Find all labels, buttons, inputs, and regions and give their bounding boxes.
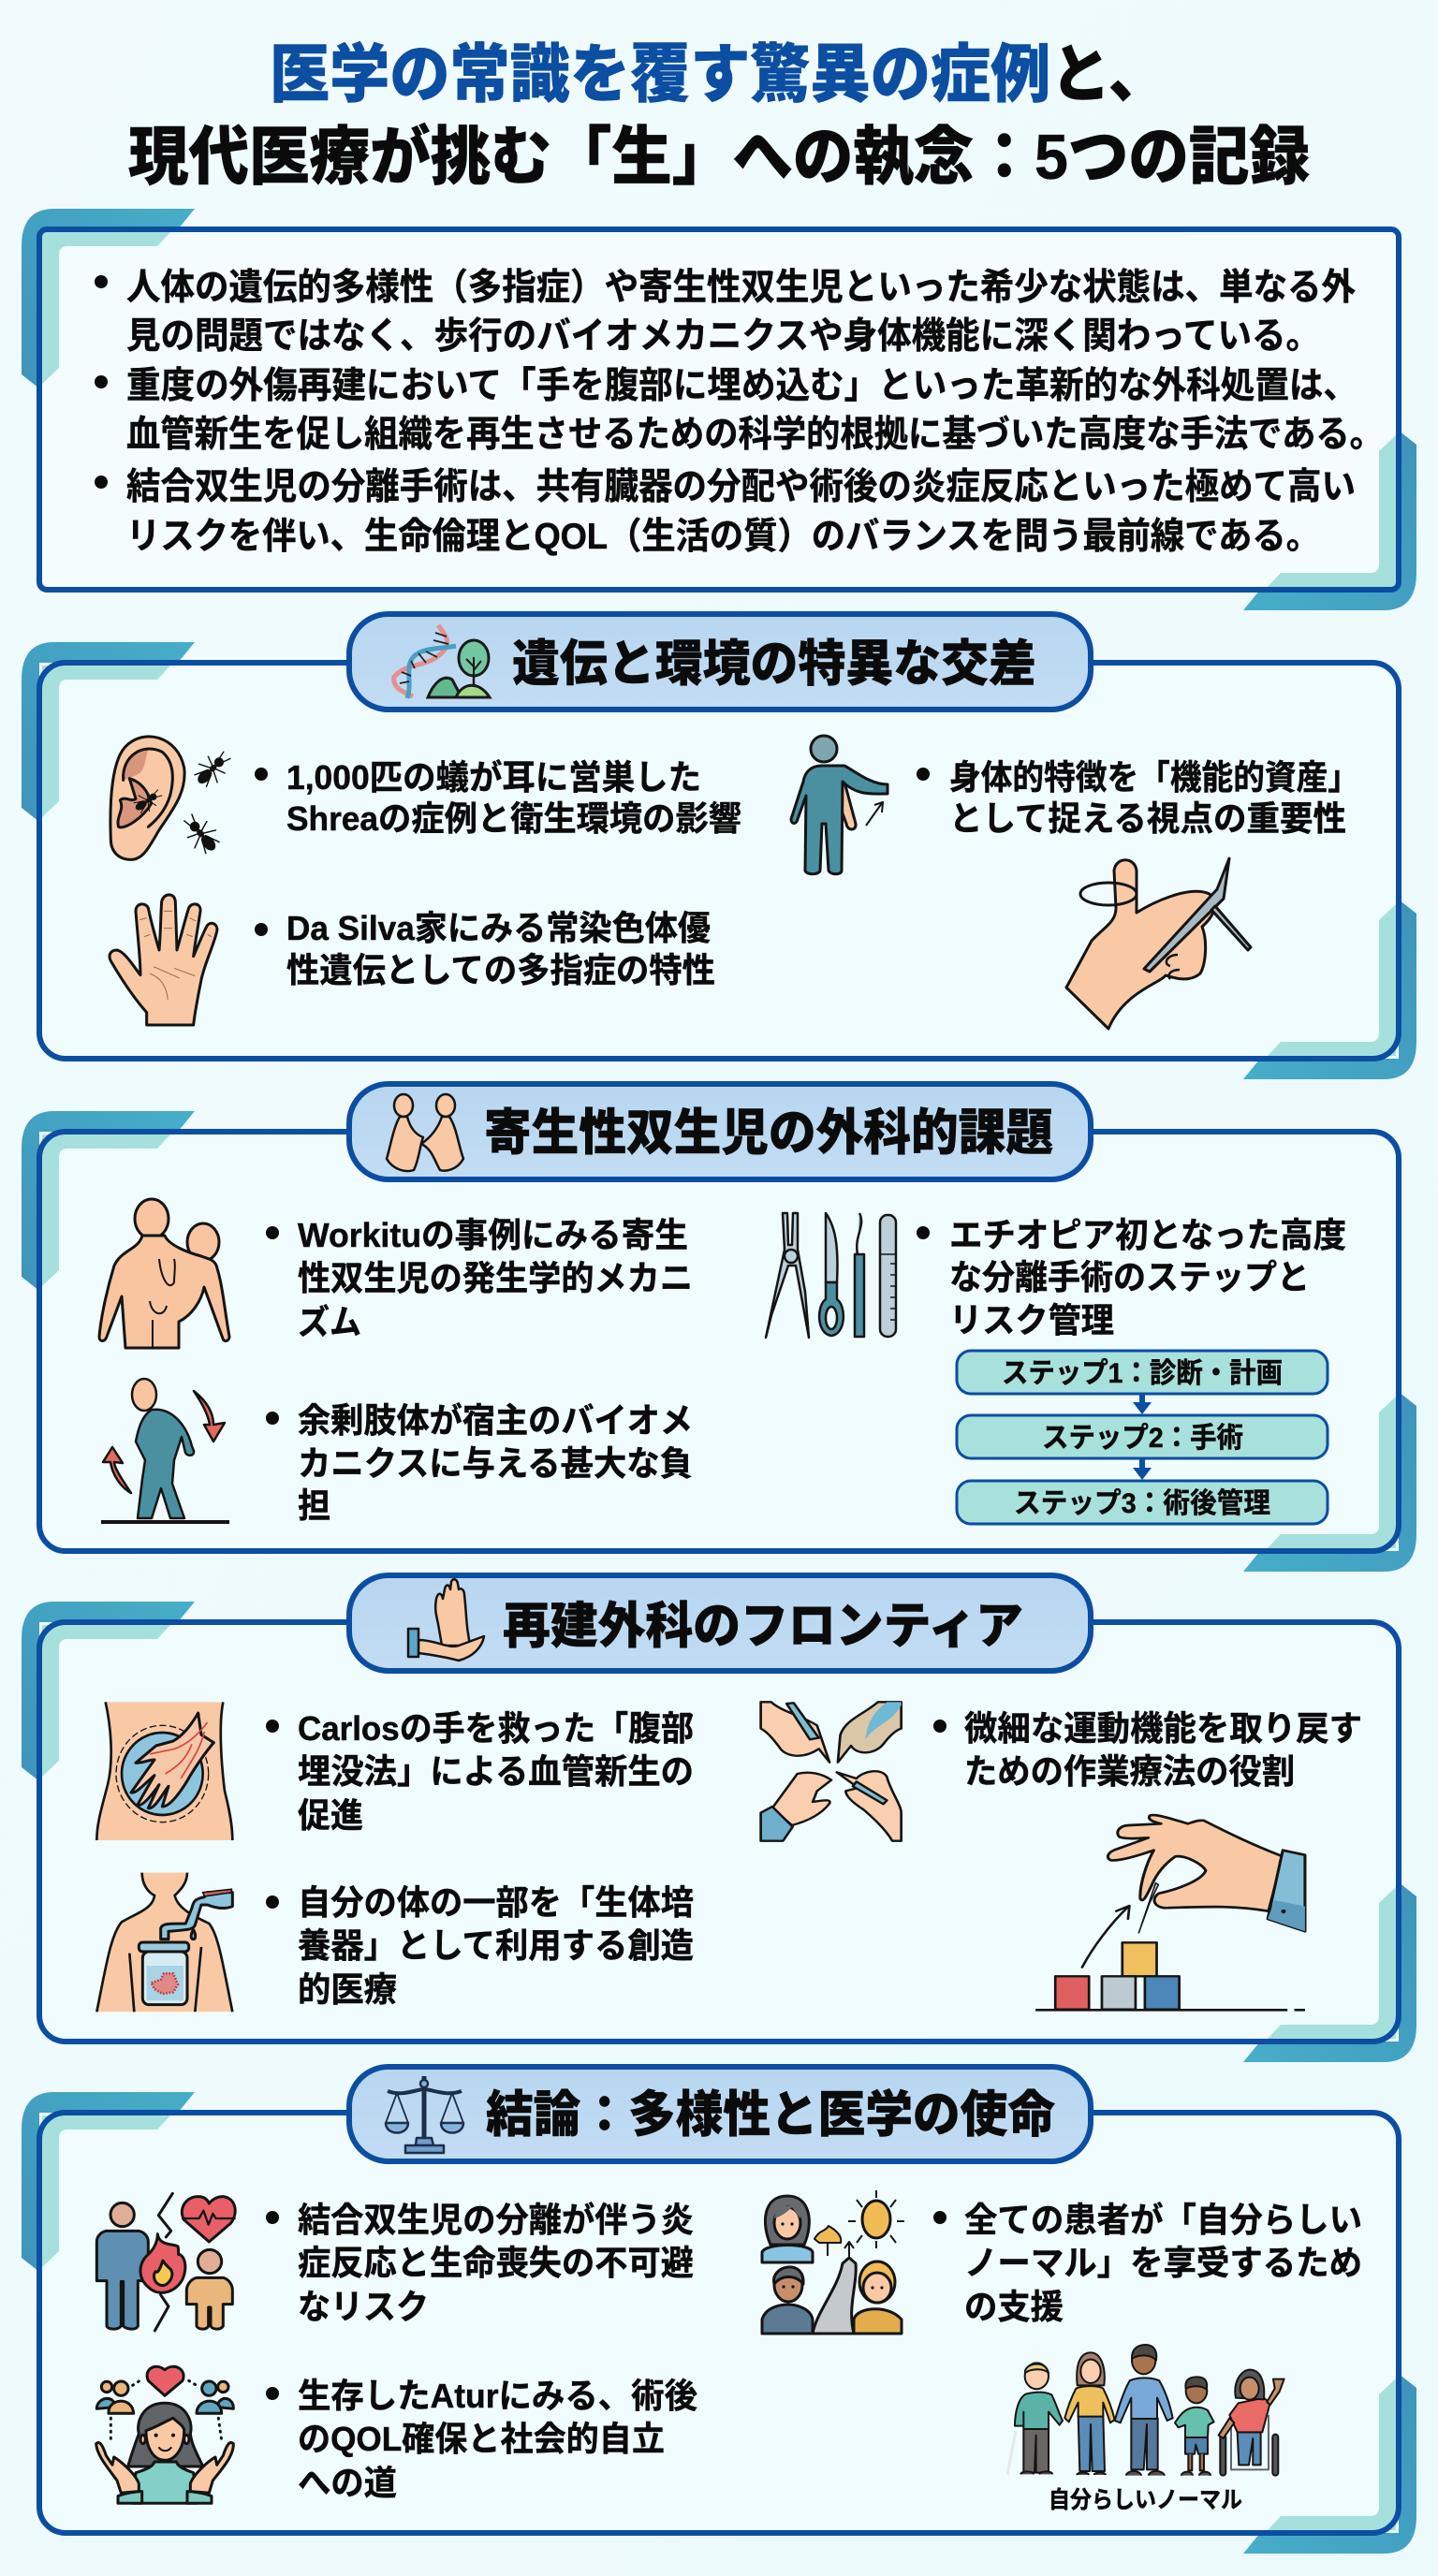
text: functional asset	[917, 758, 1359, 838]
summary bullet 3: 結合双生児の分離手術は、共有臓器の分配や術後の炎症反応といった極めて高い	[126, 467, 1356, 507]
icon: surgical tools	[766, 1213, 896, 1338]
arrow step 1 to 2	[1133, 1394, 1152, 1414]
summary bullet 3: リスクを伴い、生命倫理とQOL（生活の質）のバランスを問う最前線である。	[126, 517, 1320, 557]
text: bio incubator: 養器」として利用する創造	[298, 1926, 694, 1965]
summary bullet 1	[95, 268, 1356, 357]
text: biomechanical load: 余剰肢体が宿主のバイオメ	[298, 1401, 693, 1440]
text: Atur QOL: 生存したAturにみる、術後	[298, 2377, 697, 2415]
icon: parasitic twin body	[99, 1199, 229, 1348]
text: bio incubator: 的医療	[298, 1970, 397, 2009]
text: Atur QOL: への道	[298, 2464, 397, 2502]
text: biomechanical load	[266, 1401, 693, 1525]
icon: risk figures	[96, 2193, 236, 2331]
text: abdominal burial: Carlosの手を救った「腹部	[298, 1709, 694, 1748]
icon: hand in abdomen	[96, 1702, 232, 1840]
text: abdominal burial	[266, 1709, 694, 1835]
text: occupational therapy	[933, 1709, 1362, 1791]
summary bullet 2: 重度の外傷再建において「手を腹部に埋め込む」といった革新的な外科処置は、	[126, 366, 1357, 406]
panel: reconstructive surgery	[22, 1575, 1416, 2062]
text: Ethiopia surgery: リスク管理	[949, 1301, 1114, 1339]
text: separation risks: なリスク	[298, 2288, 429, 2326]
icon: biomechanical load	[101, 1379, 229, 1522]
panel: genetics and environment	[22, 614, 1416, 1079]
step 1	[957, 1351, 1328, 1394]
section heading pill	[349, 1084, 1091, 1179]
section heading pill: 寄生性双生児の外科的課題	[484, 1105, 1053, 1161]
section heading pill	[349, 1575, 1091, 1671]
panel: conclusion	[22, 2067, 1416, 2554]
section heading pill	[349, 614, 1091, 710]
summary bullet 2: 血管新生を促し組織を再生させるための科学的根拠に基づいた高度な手法である。	[126, 415, 1384, 455]
title	[128, 39, 1310, 193]
flow: surgery steps	[957, 1351, 1328, 1524]
panel: parasitic twin surgery	[22, 1084, 1416, 1572]
text: own normal: ノーマル」を享受するため	[964, 2244, 1362, 2282]
summary bullet 2	[95, 366, 1384, 455]
title: 医学の常識を覆す驚異の症例と、	[270, 39, 1168, 110]
section heading pill: 結論：多様性と医学の使命	[486, 2087, 1055, 2143]
text: Ethiopia surgery	[917, 1216, 1346, 1339]
text: Atur QOL	[266, 2377, 697, 2502]
icon: woman with supporting hands	[96, 2366, 233, 2503]
text: occupational therapy: ための作業療法の役割	[964, 1752, 1295, 1791]
icon: body as bioreactor	[96, 1873, 232, 2012]
section heading pill	[349, 2067, 1091, 2161]
icon: DNA and tree	[394, 625, 490, 698]
section heading pill: 再建外科のフロンティア	[503, 1599, 1023, 1654]
text: ant case: Shreaの症例と衛生環境の影響	[286, 799, 741, 838]
text: separation risks	[266, 2201, 694, 2326]
text: own normal: の支援	[964, 2288, 1064, 2326]
text: separation risks: 結合双生児の分離が伴う炎	[298, 2201, 694, 2239]
summary bullet 1: 人体の遺伝的多様性（多指症）や寄生性双生児といった希少な状態は、単なる外	[126, 268, 1356, 308]
step 1: ステップ1：診断・計画	[1002, 1358, 1283, 1389]
icon: open hand	[110, 895, 217, 1025]
section heading pill: 遺伝と環境の特異な交差	[512, 637, 1036, 692]
text: Ethiopia surgery: な分離手術のステップと	[949, 1258, 1310, 1296]
text: bio incubator: 自分の体の一部を「生体培	[298, 1883, 694, 1922]
text: Ethiopia surgery: エチオピア初となった高度	[949, 1216, 1346, 1254]
text: Workitu case: ズム	[298, 1303, 361, 1341]
text: abdominal burial: 埋没法」による血管新生の	[298, 1752, 694, 1791]
title: 現代医療が挑む「生」への執念：5つの記録	[128, 122, 1310, 193]
step 3: ステップ3：術後管理	[1014, 1488, 1270, 1519]
icon: pinching hand stacking blocks	[1035, 1815, 1305, 2010]
text: Workitu case: Workituの事例にみる寄生	[298, 1216, 688, 1254]
text: functional asset: 身体的特徴を「機能的資産」	[949, 758, 1359, 797]
text: functional asset: として捉える視点の重要性	[949, 799, 1346, 838]
text: polydactyly: 性遺伝としての多指症の特性	[286, 951, 715, 989]
icon: hand holding scalpel	[1066, 858, 1251, 1029]
text: own normal	[933, 2201, 1362, 2326]
text: occupational therapy: 微細な運動機能を取り戻す	[964, 1709, 1362, 1748]
text: abdominal burial: 促進	[298, 1796, 363, 1835]
text: biomechanical load: カニクスに与える甚大な負	[298, 1444, 693, 1483]
icon: twins	[387, 1094, 463, 1171]
icon: ear with ants	[110, 737, 236, 859]
icon: four working hands	[761, 1702, 902, 1841]
summary bullet 1: 見の問題ではなく、歩行のバイオメカニクスや身体機能に深く関わっている。	[126, 316, 1320, 357]
step 2: ステップ2：手術	[1042, 1423, 1243, 1454]
text: polydactyly: Da Silva家にみる常染色体優	[286, 909, 711, 947]
step 2	[957, 1415, 1328, 1458]
icon: person with extra arm	[791, 736, 888, 874]
text: biomechanical load: 担	[298, 1486, 330, 1525]
text: ant case: 1,000匹の蟻が耳に営巣した	[286, 758, 701, 797]
text: polydactyly	[255, 909, 715, 989]
panel: summary	[22, 209, 1416, 610]
text: ant case	[255, 758, 741, 838]
icon: diverse people with sun and road	[762, 2190, 904, 2334]
text: Atur QOL: のQOL確保と社会的自立	[298, 2420, 665, 2458]
text: separation risks: 症反応と生命喪失の不可避	[298, 2244, 694, 2282]
arrow step 2 to 3	[1133, 1458, 1152, 1480]
text: Workitu case: 性双生児の発生学的メカニ	[298, 1259, 693, 1297]
icon: raised hand on palm	[408, 1579, 484, 1661]
text: bio incubator	[266, 1883, 694, 2009]
caption: own normal: 自分らしいノーマル	[1049, 2487, 1242, 2513]
icon: scales	[386, 2076, 463, 2153]
summary bullet 3	[95, 467, 1356, 557]
icon: diverse family holding hands	[1007, 2345, 1284, 2476]
text: Workitu case	[266, 1216, 693, 1341]
text: own normal: 全ての患者が「自分らしい	[964, 2201, 1362, 2239]
step 3	[957, 1481, 1328, 1524]
